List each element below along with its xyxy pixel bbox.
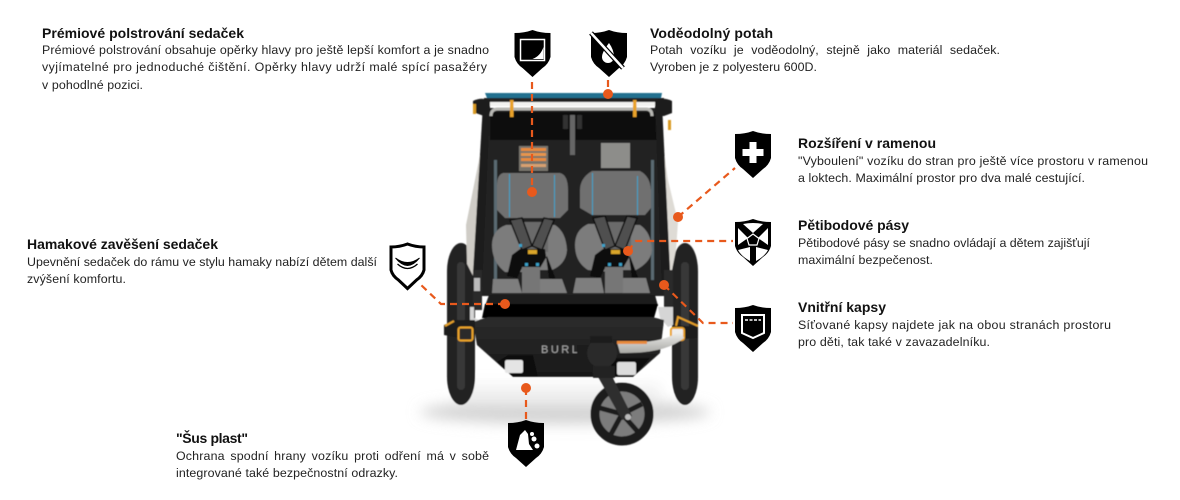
logo: BURL bbox=[541, 344, 580, 356]
text: Hamakové zavěšení sedaček bbox=[27, 236, 378, 286]
text: Rozšíření v ramenou bbox=[798, 135, 1148, 185]
text: Hamakové zavěšení sedaček: Hamakové zavěšení sedaček bbox=[27, 236, 218, 252]
text: Vnitřní kapsy: Síťované kapsy najdete jak na obou stranách prostoru bbox=[798, 318, 1111, 332]
rear wheels bbox=[447, 243, 698, 405]
icon: padded seat shield bbox=[514, 30, 550, 77]
stroller photo bbox=[420, 93, 710, 441]
text: Šus plast: Ochrana spodní hrany vozíku proti odření má v sobě bbox=[176, 449, 489, 463]
text: Vnitřní kapsy bbox=[798, 299, 1111, 349]
suspension arms bbox=[470, 270, 673, 327]
frame posts bbox=[472, 104, 490, 290]
left seat bbox=[492, 218, 567, 293]
text: Voděodolný potah: Voděodolný potah bbox=[650, 25, 773, 41]
text: Vnitřní kapsy: Vnitřní kapsy bbox=[798, 299, 886, 315]
right seat bbox=[573, 216, 652, 293]
ground shadow bbox=[420, 385, 710, 424]
icon: pocket shield bbox=[735, 305, 771, 352]
text: Rozšíření v ramenou: a loktech. Maximální prostor pro dva malé cestující. bbox=[798, 171, 1085, 185]
text: Prémiové polstrování sedaček: vyjímatelné pro jednoduché čištění. Opěrky hlavy udrží malé spící pasažéry bbox=[42, 60, 488, 74]
headrests bbox=[497, 171, 651, 218]
text: Pětibodové pásy: Pětibodové pásy bbox=[798, 217, 909, 233]
text: Prémiové polstrování sedaček: Prémiové polstrování obsahuje opěrky hlavy pro ještě lepší komfort a je snadno bbox=[42, 43, 489, 57]
icon: plastic guard shield bbox=[508, 420, 544, 467]
text: Rozšíření v ramenou: "Vyboulení" vozíku do stran pro ještě více prostoru v ramenou bbox=[798, 154, 1148, 168]
reflectors bbox=[497, 355, 650, 377]
icon: plus shield bbox=[735, 131, 771, 178]
front wheel and fork bbox=[577, 336, 649, 441]
footwell bbox=[482, 295, 658, 318]
handle arm bbox=[617, 331, 684, 353]
side rails bbox=[494, 160, 654, 280]
text: Voděodolný potah: Potah vozíku je voděodolný, stejně jako materiál sedaček. bbox=[650, 43, 1000, 57]
cabin interior bbox=[478, 108, 668, 296]
text: Voděodolný potah: Vyroben je z polyesteru 600D. bbox=[650, 60, 817, 74]
icon: water resistant shield bbox=[591, 30, 627, 77]
front tray bbox=[473, 317, 664, 377]
centre strap bbox=[563, 115, 582, 155]
text: Šus plast bbox=[176, 429, 489, 480]
icon: hammock shield bbox=[391, 244, 424, 288]
text: Prémiové polstrování sedaček: v pohodlné pozici. bbox=[42, 78, 143, 92]
text: Pětibodové pásy: Pětibodové pásy se snadno ovládají a dětem zajišťují bbox=[798, 236, 1091, 250]
top bar bbox=[473, 93, 672, 130]
silver side panels bbox=[466, 135, 490, 290]
text: Šus plast: "Šus plast" bbox=[176, 429, 248, 446]
text: Prémiové polstrování sedaček: Prémiové polstrování sedaček bbox=[42, 25, 244, 41]
text: Hamakové zavěšení sedaček: Upevnění sedaček do rámu ve stylu hamaky nabízí dětem další bbox=[27, 255, 378, 269]
text: Rozšíření v ramenou: Rozšíření v ramenou bbox=[798, 135, 936, 151]
icon: five-point harness shield bbox=[735, 219, 771, 266]
text: Voděodolný potah bbox=[650, 25, 1000, 74]
text: Pětibodové pásy: maximální bezpečenost. bbox=[798, 253, 933, 267]
warning label bbox=[519, 146, 548, 171]
text: Vnitřní kapsy: pro děti, tak také v zavazadelníku. bbox=[798, 335, 990, 349]
mesh pocket bbox=[601, 143, 630, 168]
text: Hamakové zavěšení sedaček: zvýšení komfortu. bbox=[27, 272, 126, 286]
text: Šus plast: integrované také bezpečnostní odrazky. bbox=[176, 466, 398, 480]
text: Pětibodové pásy bbox=[798, 217, 1091, 267]
side brackets bbox=[444, 317, 698, 341]
text: Prémiové polstrování sedaček bbox=[42, 25, 489, 92]
callout lines and dots bbox=[420, 80, 735, 420]
